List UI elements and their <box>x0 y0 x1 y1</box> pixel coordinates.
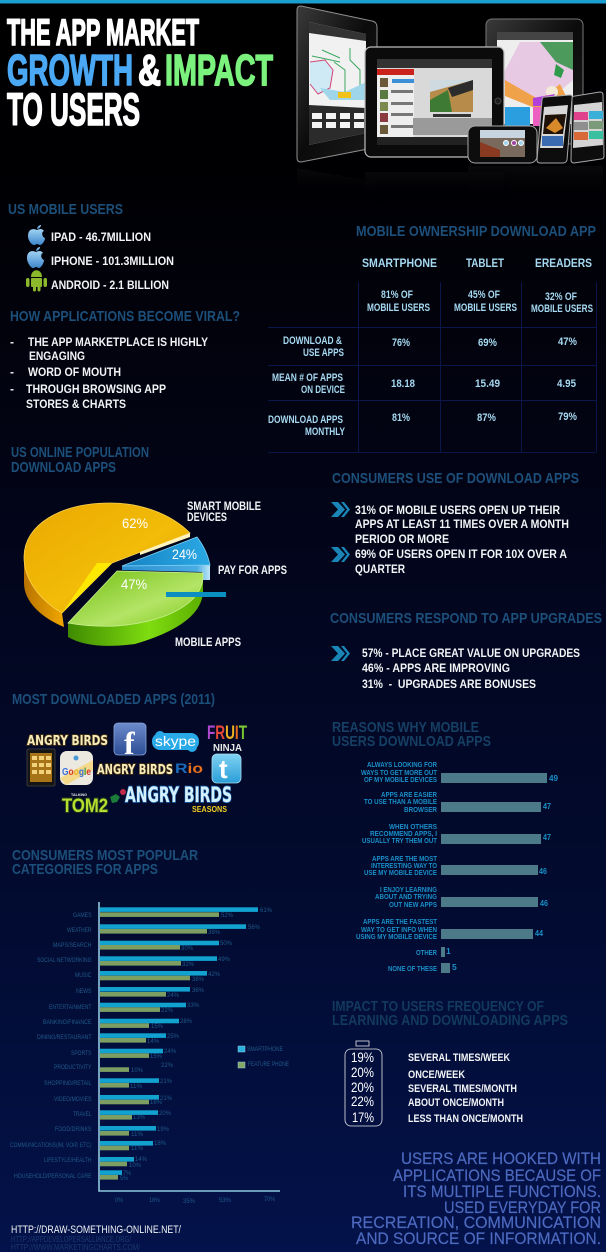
row: video and movies <box>54 1095 172 1106</box>
row: social networking: 49% <box>218 956 230 963</box>
frequency labels: ONCE/WEEK <box>408 1069 465 1081</box>
axis tick labels: 35% <box>183 1198 195 1205</box>
icon: twitter: t <box>219 754 228 784</box>
sources: HTTP://DRAW-SOMETHING-ONLINE.NET/ <box>11 1224 182 1236</box>
row: shopping and retail: 21% <box>160 1078 172 1085</box>
title: THE APP MARKET <box>7 12 199 53</box>
column headers: TABLET <box>466 256 505 270</box>
percent labels: 62% <box>122 515 148 531</box>
heading: US MOBILE USERS <box>8 201 123 218</box>
row: music: MUSIC <box>75 972 92 979</box>
row: download apps monthly <box>268 411 577 438</box>
row: none of these: 5 <box>452 962 457 972</box>
text block: second stat <box>355 547 567 576</box>
row: communications: COMMUNICATIONS(IM, VOIP, ETC) <box>10 1142 92 1149</box>
row: household and personal care: HOUSEHOLD/PERSONAL CARE <box>14 1173 92 1180</box>
slice: pay for apps <box>122 537 210 580</box>
slice labels: SMART MOBILE <box>187 499 261 513</box>
logo: talking tom 2: TALKING <box>71 792 87 797</box>
row: video and movies: 16% <box>150 1099 162 1106</box>
row: download and use apps: 69% <box>478 337 497 349</box>
icon: facebook: f <box>124 725 135 761</box>
row: entertainment <box>49 1002 199 1014</box>
heading: LEARNING AND DOWNLOADING APPS <box>332 1012 568 1029</box>
list: ENGAGING <box>29 349 85 363</box>
chart axes <box>99 902 280 1191</box>
row: learning new apps <box>375 885 548 909</box>
row: communications: 18% <box>154 1140 166 1147</box>
row: download and use apps: 47% <box>558 336 577 348</box>
percent labels <box>121 515 197 592</box>
row: ownership: 81% OF <box>381 289 413 301</box>
section: consumers most popular categories <box>10 847 289 1205</box>
axis tick labels: 53% <box>219 1197 231 1204</box>
icon: chevrons <box>331 646 350 661</box>
row: news: NEWS <box>76 988 92 995</box>
row: easier than browser: TO USE THAN A MOBILE <box>364 797 437 806</box>
icon: android <box>26 270 47 292</box>
icon: battery with percentages: 22% <box>351 1094 374 1109</box>
row: sports: SPORTS <box>71 1050 92 1057</box>
row: games: GAMES <box>73 912 92 919</box>
row: learning new apps: ABOUT AND TRYING <box>375 892 437 901</box>
row: productivity: 10% <box>131 1067 143 1074</box>
logo: fruit ninja <box>207 723 247 754</box>
frequency labels: ABOUT ONCE/MONTH <box>408 1097 504 1109</box>
row: productivity: PRODUCTIVITY <box>54 1064 92 1071</box>
row: dining and restaurant: DINING/RESTAURANT <box>37 1034 92 1041</box>
row: travel: TRAVEL <box>73 1111 92 1118</box>
heading <box>332 998 568 1029</box>
logo: skype: skype <box>155 733 196 749</box>
row: shopping and retail: 11% <box>130 1083 142 1090</box>
row: travel: 13% <box>133 1114 145 1121</box>
row: fastest way: WAY TO GET INFO WHEN <box>361 925 437 934</box>
row: mean number of apps <box>272 372 576 396</box>
sources: HTTP://APPDEVELOPERSALLIANCE.ORG/ <box>11 1235 132 1244</box>
sources: HTTP://WWW.MARKETINGCHARTS.COM/ <box>11 1243 141 1252</box>
row: weather: WEATHER <box>67 927 92 934</box>
row: household and personal care: 7% <box>123 1170 131 1177</box>
icon: chevrons <box>331 547 350 562</box>
row: weather: 56% <box>248 924 260 931</box>
logo: skype <box>152 731 199 752</box>
list <box>10 335 208 411</box>
label: iPad: IPAD - 46.7MILLION <box>51 230 151 244</box>
row: other: 1 <box>446 946 451 956</box>
list: STORES & CHARTS <box>26 397 126 411</box>
tablet: article <box>365 47 504 157</box>
heading: DOWNLOAD APPS <box>11 459 116 476</box>
row: household and personal care: 5% <box>120 1175 128 1182</box>
panel: mobile ownership table <box>268 223 596 452</box>
row: dining and restaurant: 14% <box>147 1038 159 1045</box>
text block: upgrades <box>362 646 580 691</box>
logo: fruit ninja: FRUIT <box>207 723 247 744</box>
slice: smart mobile devices <box>24 503 190 627</box>
logo: fruit ninja: NINJA <box>213 743 242 754</box>
heading: USERS DOWNLOAD APPS <box>332 733 491 750</box>
device reflections <box>297 166 603 200</box>
row: most interesting way: INTERESTING WAY TO <box>371 861 437 870</box>
row: more out of devices <box>361 760 558 784</box>
row: recommendations: RECOMMEND APPS, I <box>370 829 437 838</box>
row: banking and finance: 15% <box>151 1023 163 1030</box>
row: video and movies: VIDEO/MOVIES <box>54 1096 92 1103</box>
label: Android: ANDROID - 2.1 BILLION <box>51 278 169 292</box>
row: ownership: MOBILE USERS <box>454 302 517 314</box>
column headers: SMARTPHONE <box>362 256 437 270</box>
row: shopping and retail: SHOPPING/RETAIL <box>44 1080 92 1087</box>
bar chart: reasons <box>356 760 558 973</box>
row: sports: 24% <box>164 1048 176 1055</box>
list: - <box>10 365 14 379</box>
row: sports: 15% <box>150 1053 162 1060</box>
legend <box>238 1046 289 1068</box>
row: learning new apps: 46 <box>540 898 548 908</box>
row: download and use apps: DOWNLOAD & <box>283 335 342 347</box>
list: WORD OF MOUTH <box>28 365 121 379</box>
text block: first stat: 31% OF MOBILE USERS OPEN UP THEIR <box>355 503 560 517</box>
row: productivity <box>54 1062 173 1074</box>
row: ownership: 32% OF <box>545 291 577 303</box>
text block: first stat: PERIOD OR MORE <box>355 532 449 546</box>
row: dining and restaurant <box>37 1033 179 1045</box>
row: news: 24% <box>167 992 179 999</box>
row: games <box>73 907 272 919</box>
row: social networking <box>37 956 230 968</box>
row: lifestyle and health: 14% <box>135 1156 147 1163</box>
row: download apps monthly: 87% <box>477 412 496 424</box>
frequency labels <box>408 1052 523 1125</box>
heading: HOW APPLICATIONS BECOME VIRAL? <box>10 308 240 325</box>
slice labels: MOBILE APPS <box>175 635 241 649</box>
row: download apps monthly: DOWNLOAD APPS <box>268 414 343 426</box>
heading: US ONLINE POPULATION <box>11 444 149 461</box>
tablet: transit map <box>297 6 377 162</box>
section: reasons why mobile users download apps <box>332 719 558 973</box>
phone: portrait food <box>537 95 572 163</box>
row: ownership: MOBILE USERS <box>367 302 430 314</box>
row: lifestyle and health: LIFESTYLE/HEALTH <box>44 1157 92 1164</box>
list: - <box>10 335 14 349</box>
row: ownership <box>367 289 593 315</box>
row: maps and search: 30% <box>181 945 193 952</box>
legend: FEATURE PHONE <box>248 1061 289 1068</box>
row: news: 36% <box>192 987 204 994</box>
row: food and drinks: FOOD/DRINKS <box>55 1126 92 1133</box>
row: recommendations: 47 <box>543 832 551 842</box>
row: food and drinks <box>55 1126 169 1138</box>
row: games: 61% <box>260 907 272 914</box>
icon: battery with percentages: 19% <box>351 1050 374 1065</box>
frequency labels: SEVERAL TIMES/WEEK <box>408 1052 510 1064</box>
row: social networking: SOCIAL NETWORKING <box>37 957 92 964</box>
row: most interesting way <box>364 854 547 877</box>
legend: SMARTPHONE <box>247 1046 284 1053</box>
slice labels: PAY FOR APPS <box>218 563 287 577</box>
row: mean number of apps: MEAN # OF APPS <box>272 372 343 384</box>
axis tick labels <box>115 1196 275 1205</box>
icon: facebook <box>114 723 146 761</box>
row: download apps monthly: 81% <box>392 412 410 424</box>
row: shopping and retail <box>44 1078 172 1090</box>
row: fastest way: APPS ARE THE FASTEST <box>363 917 437 926</box>
section: US online population <box>11 444 287 649</box>
icon: apple iPad <box>28 225 45 245</box>
row: video and movies: 21% <box>160 1095 172 1102</box>
row: productivity: 22% <box>161 1062 173 1069</box>
row: sports <box>71 1048 176 1060</box>
row: download and use apps: 76% <box>392 337 410 349</box>
axis tick labels: 0% <box>115 1197 123 1204</box>
frequency labels: LESS THAN ONCE/MONTH <box>408 1113 523 1125</box>
section: consumers respond to app upgrades <box>330 610 602 691</box>
row: communications: 11% <box>131 1145 143 1152</box>
row: maps and search: 50% <box>220 940 232 947</box>
row: weather <box>67 924 260 936</box>
heading: IMPACT TO USERS FREQUENCY OF <box>332 998 544 1015</box>
row: food and drinks: 19% <box>157 1126 169 1133</box>
row: news <box>76 987 204 999</box>
slice labels <box>175 499 287 649</box>
icon: iPad bookshelf <box>27 749 55 786</box>
logo: angry birds: ANGRY BIRDS <box>27 734 108 749</box>
axis tick labels: 70% <box>264 1196 275 1203</box>
heading: CONSUMERS MOST POPULAR <box>12 847 198 864</box>
bar chart: categories <box>10 902 289 1205</box>
row: easier than browser: 47 <box>543 801 551 811</box>
row: games: 52% <box>221 912 233 919</box>
phone: portrait menu <box>571 92 604 163</box>
icon: chevrons <box>331 502 350 517</box>
text block: first stat: APPS AT LEAST 11 TIMES OVER A MONTH <box>355 517 569 531</box>
row: weather: 39% <box>208 929 220 936</box>
row: easier than browser: APPS ARE EASIER <box>381 790 437 799</box>
section: consumers use of download apps <box>331 470 579 576</box>
row: fastest way: USING MY MOBILE DEVICE <box>356 932 437 941</box>
logo: angry birds seasons: SEASONS <box>192 805 228 814</box>
row: learning new apps: I ENJOY LEARNING <box>380 885 437 894</box>
icon: battery with percentages: 17% <box>352 1110 374 1125</box>
column headers <box>362 256 592 270</box>
sources <box>11 1224 182 1252</box>
logo: angry birds seasons <box>110 783 232 814</box>
row: music <box>75 971 220 983</box>
row: more out of devices: WAYS TO GET MORE OUT <box>361 768 437 777</box>
row: entertainment: 22% <box>161 1007 173 1014</box>
text block: upgrades: 46% - APPS ARE IMPROVING <box>362 661 510 675</box>
list: THE APP MARKETPLACE IS HIGHLY <box>28 335 208 349</box>
heading <box>12 847 198 878</box>
row: travel <box>73 1110 171 1121</box>
row: music: 38% <box>192 976 204 983</box>
icon: battery with percentages: 20% <box>351 1065 374 1080</box>
row: ownership: 45% OF <box>468 289 500 301</box>
row: none of these: NONE OF THESE <box>388 964 437 973</box>
row: most interesting way: APPS ARE THE MOST <box>372 854 437 863</box>
row: download and use apps <box>283 335 577 359</box>
row: maps and search <box>53 940 232 952</box>
title: TO USERS <box>7 84 140 135</box>
heading: MOST DOWNLOADED APPS (2011) <box>12 691 215 708</box>
row: banking and finance <box>43 1018 192 1030</box>
slice labels: DEVICES <box>187 510 227 524</box>
heading: CATEGORIES FOR APPS <box>12 861 158 878</box>
row: learning new apps: OUT NEW APPS <box>389 900 437 909</box>
section: how applications become viral <box>10 308 240 411</box>
row: mean number of apps: 4.95 <box>557 378 576 390</box>
text block: first stat <box>355 503 569 546</box>
row: mean number of apps: 15.49 <box>475 378 500 390</box>
text block: second stat: 69% OF USERS OPEN IT FOR 10X OVER A <box>355 547 567 561</box>
axis tick labels: 18% <box>149 1197 160 1204</box>
row: other <box>416 946 451 957</box>
row: household and personal care <box>14 1170 131 1182</box>
row: food and drinks: 11% <box>131 1131 143 1138</box>
row: fastest way <box>356 917 543 941</box>
hero image: tablets and phones <box>297 6 604 200</box>
row: download and use apps: USE APPS <box>303 347 344 359</box>
list: THROUGH BROWSING APP <box>26 382 166 396</box>
section: impact to users <box>332 998 568 1126</box>
row: most interesting way: USE MY MOBILE DEVICE <box>364 868 437 877</box>
row: most interesting way: 46 <box>539 866 547 876</box>
row: lifestyle and health: 10% <box>129 1162 141 1169</box>
row: mean number of apps: 18.18 <box>391 378 415 390</box>
icon: apple iPhone <box>27 247 44 268</box>
row: download apps monthly: 79% <box>558 411 577 423</box>
row: social networking: 32% <box>182 961 194 968</box>
pointer bar <box>166 592 226 597</box>
row: banking and finance: 28% <box>180 1018 192 1025</box>
frequency labels: SEVERAL TIMES/MONTH <box>408 1083 517 1095</box>
percent labels: 24% <box>172 546 197 562</box>
row: travel: 20% <box>159 1110 171 1117</box>
row: maps and search: MAPS/SEARCH <box>53 942 92 949</box>
text block: second stat: QUARTER <box>355 562 405 576</box>
row: mean number of apps: ON DEVICE <box>301 384 345 396</box>
row: entertainment: 33% <box>187 1002 199 1009</box>
icon: google maps <box>60 751 93 785</box>
title: IMPACT <box>165 46 273 95</box>
logo: angry birds rio: ANGRY BIRDS <box>97 763 173 778</box>
section: US mobile users <box>8 201 174 292</box>
text block: upgrades: 31% - UPGRADES ARE BONUSES <box>362 677 536 691</box>
row: recommendations <box>362 822 551 845</box>
heading <box>11 444 149 476</box>
row: download apps monthly: MONTHLY <box>305 426 345 438</box>
list: - <box>10 382 14 396</box>
icon: battery with percentages <box>345 1041 382 1126</box>
icon: twitter <box>212 754 241 784</box>
logo: talking tom 2: TOM2 <box>62 796 108 817</box>
title <box>7 12 273 135</box>
row: banking and finance: BANKING/FINANCE <box>43 1019 92 1026</box>
heading <box>332 719 491 750</box>
row: recommendations: WHEN OTHERS <box>389 822 437 831</box>
table grid <box>268 282 596 452</box>
row: more out of devices: 49 <box>549 773 558 783</box>
title: & <box>138 46 161 95</box>
tablet: magazine <box>486 19 583 144</box>
label: iPhone: IPHONE - 101.3MILLION <box>51 254 174 268</box>
logo: angry birds rio: Rio <box>175 760 203 776</box>
row: more out of devices: ALWAYS LOOKING FOR <box>367 760 437 769</box>
column headers: EREADERS <box>535 256 592 270</box>
row: communications <box>10 1140 166 1152</box>
percent labels: 47% <box>121 576 147 592</box>
phone: landscape <box>468 126 537 163</box>
slice: mobile apps <box>68 571 203 646</box>
row: other: OTHER <box>416 948 437 957</box>
logo: angry birds seasons: ANGRY BIRDS <box>125 783 232 807</box>
row: fastest way: 44 <box>535 928 543 938</box>
row: easier than browser <box>364 790 551 814</box>
icon: battery with percentages: 20% <box>351 1080 374 1095</box>
title: GROWTH <box>7 46 133 95</box>
row: more out of devices: OF MY MOBILE DEVICES <box>364 775 437 784</box>
row: recommendations: USUALLY TRY THEM OUT <box>362 836 437 845</box>
icon: google maps: Google <box>62 767 91 778</box>
row: lifestyle and health <box>44 1156 147 1169</box>
row: music: 42% <box>208 971 220 978</box>
row: easier than browser: BROWSER <box>404 805 437 814</box>
row: entertainment: ENTERTAINMENT <box>49 1004 92 1011</box>
section: most downloaded apps <box>12 691 247 817</box>
pie chart <box>24 499 287 649</box>
row: dining and restaurant: 25% <box>167 1033 179 1040</box>
closing statement <box>351 1149 601 1248</box>
heading: REASONS WHY MOBILE <box>332 719 479 736</box>
